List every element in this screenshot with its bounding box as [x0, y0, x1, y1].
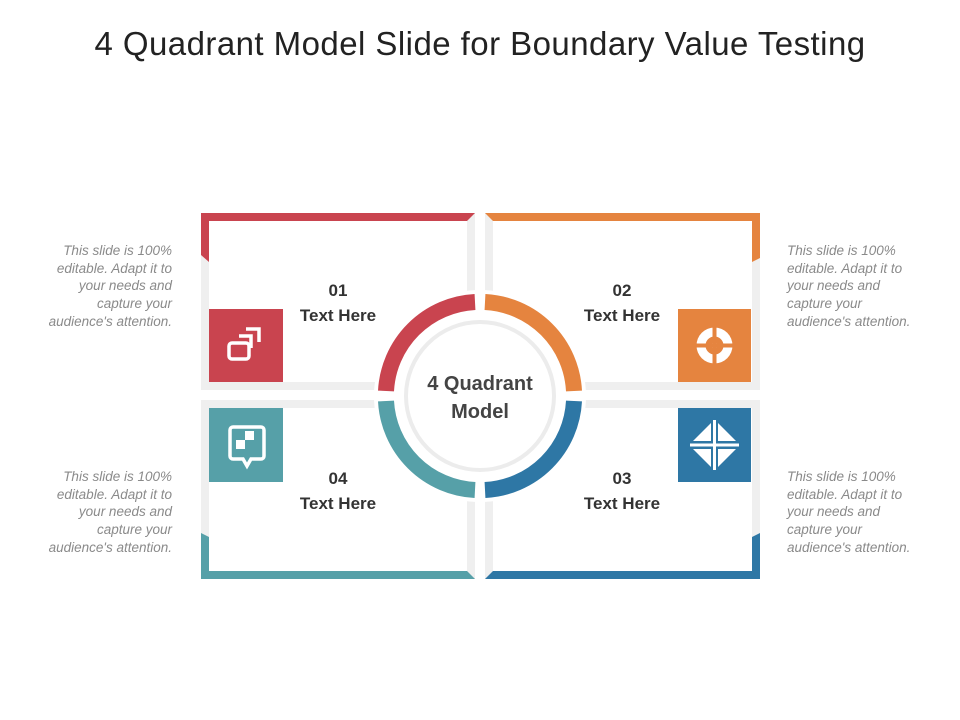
icon 01 — [209, 309, 283, 382]
quadrant 02: Text Here — [584, 306, 660, 325]
quadrant 04 — [201, 400, 475, 579]
icon 02 — [678, 309, 751, 382]
quadrant 02: 02 — [613, 281, 631, 300]
quadrant 01 — [201, 213, 475, 390]
icon 04 — [209, 408, 283, 482]
quadrant 03: Text Here — [584, 494, 660, 513]
center ring — [374, 290, 586, 502]
side text: top left: This slide is 100% editable. Adapt it to your needs and capture your audience's attention. — [49, 243, 172, 329]
quadrant 01: Text Here — [300, 306, 376, 325]
quadrant 04: 04 — [329, 469, 348, 488]
icon 03 — [678, 408, 751, 482]
side text: bottom right: This slide is 100% editable. Adapt it to your needs and capture your audience's attention. — [787, 469, 910, 555]
quadrant 03 — [485, 400, 760, 579]
quadrant 03: 03 — [613, 469, 631, 488]
center ring: Model — [451, 401, 509, 423]
quadrant 02 — [485, 213, 760, 390]
quadrant 01: 01 — [329, 281, 347, 300]
side text: top right: This slide is 100% editable. Adapt it to your needs and capture your audience's attention. — [787, 243, 910, 329]
side text: bottom left: This slide is 100% editable. Adapt it to your needs and capture your audience's attention. — [49, 469, 172, 555]
title: 4 Quadrant Model Slide for Boundary Value Testing — [94, 25, 866, 62]
quadrant 04: Text Here — [300, 494, 376, 513]
center label: 4 Quadrant — [427, 373, 533, 395]
